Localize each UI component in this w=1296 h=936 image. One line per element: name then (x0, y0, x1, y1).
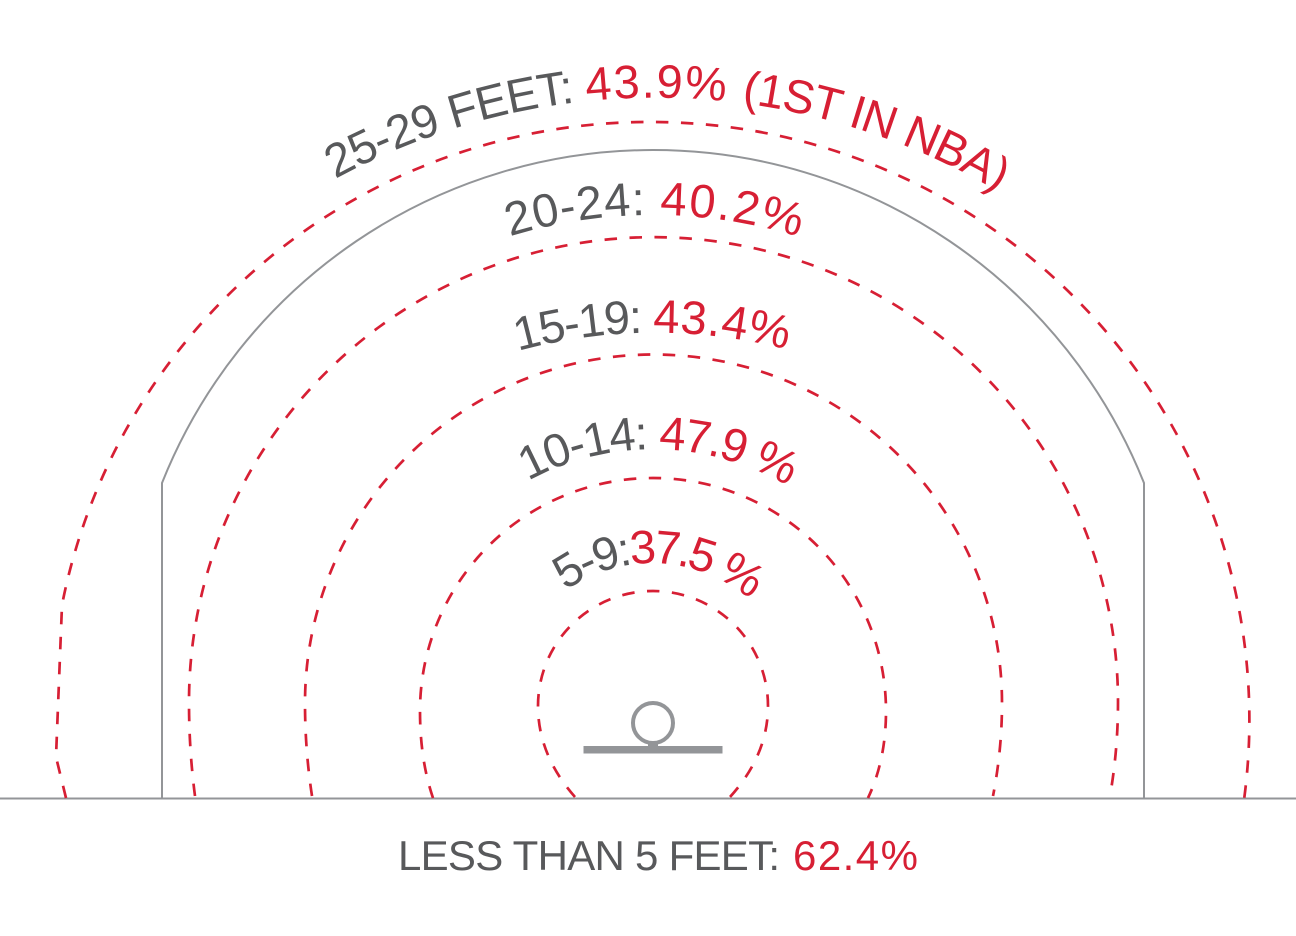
three-point line (162, 150, 1144, 798)
label: 10-14 feet: 10-14: 47.9 % (520, 418, 796, 483)
label: 20-24 feet: 20-24: 40.2% (506, 183, 801, 236)
baseline (0, 798, 1296, 800)
zone arc: 5-9 feet (538, 591, 768, 797)
zone arc: 15-19 feet (305, 354, 1002, 796)
zone arc: 10-14 feet (420, 478, 886, 798)
zone arc: 20-24 feet (189, 237, 1118, 796)
label: 5-9 feet: 5-9:37.5 % (552, 530, 762, 596)
icon: basketball hoop (584, 703, 722, 754)
label: less than 5 feet: 62.4% (793, 832, 918, 879)
zone arc: 25-29 feet (56, 122, 1249, 800)
label: 25-29 feet: 25-29 FEET: 43.9% (1ST IN NBA) (326, 65, 1006, 194)
label: 15-19 feet: 15-19: 43.4% (516, 300, 788, 350)
label: less than 5 feet: LESS THAN 5 FEET: (398, 832, 780, 879)
